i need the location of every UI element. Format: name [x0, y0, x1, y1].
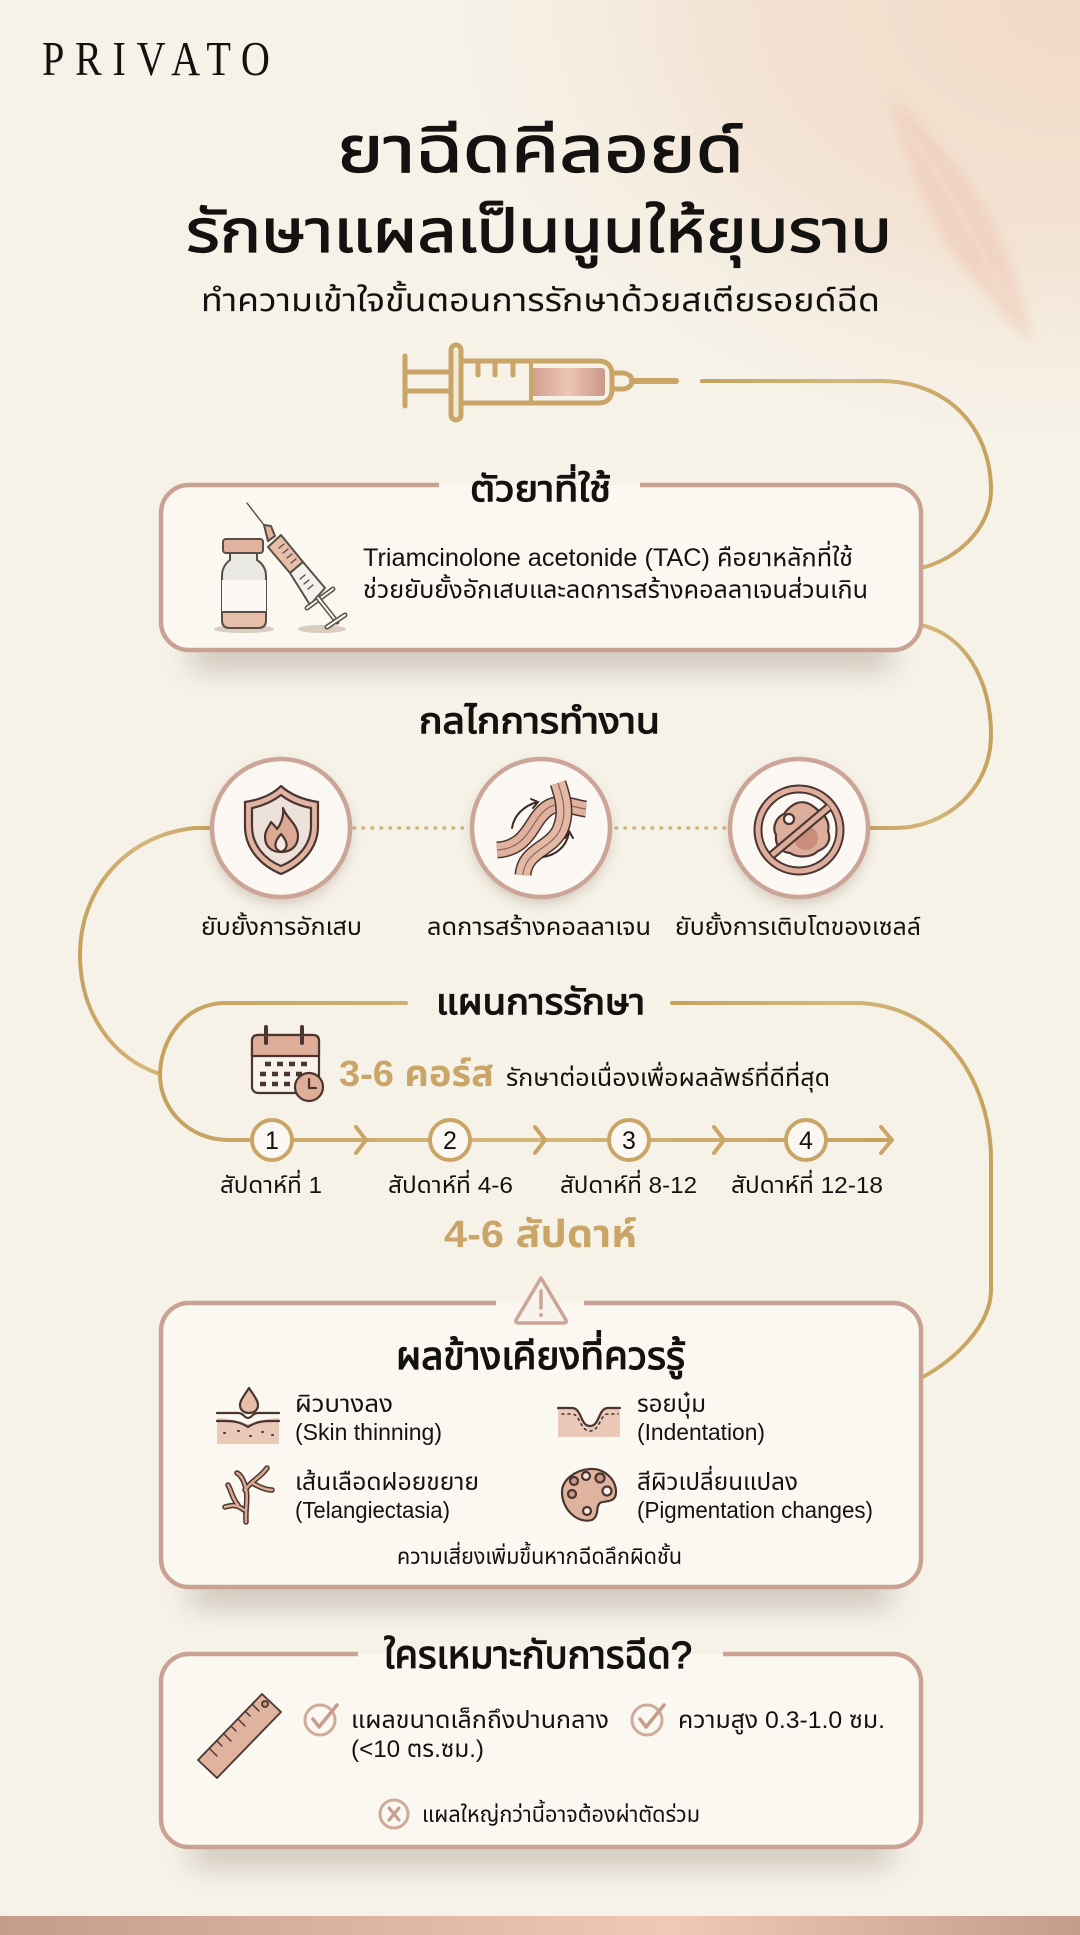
text: drug description: Triamcinolone acetonide (TAC) คือยาหลักที่ใช้ — [363, 540, 853, 572]
connector path: plan header left to timeline — [160, 1003, 890, 1140]
item: skin thinning — [217, 1388, 442, 1445]
step 4 — [786, 1120, 826, 1160]
heading: who: ใครเหมาะกับการฉีด? — [384, 1635, 692, 1677]
item: skin thinning: ผิวบางลง — [295, 1391, 393, 1418]
icon: ruler — [198, 1694, 281, 1778]
week labels: สัปดาห์ที่ 8-12 — [560, 1169, 697, 1198]
text: interval: 4-6 สัปดาห์ — [444, 1214, 637, 1256]
arrows — [356, 1127, 892, 1153]
heading: treatment plan: แผนการรักษา — [436, 981, 645, 1022]
connector path: mechanism to plan — [80, 828, 210, 1074]
check item: small size: (<10 ตร.ซม.) — [351, 1736, 484, 1763]
step 2 — [430, 1120, 470, 1160]
panel: drug used: ช่วยยับยั้งอักเสบและลดการสร้างคอลลาเจนส่วนเกิน — [363, 573, 868, 604]
footer bar — [0, 1916, 1080, 1935]
label: ยับยั้งการเติบโตของเซลล์ — [675, 911, 921, 941]
step 4: 4 — [799, 1127, 813, 1155]
item: pigmentation: สีผิวเปลี่ยนแปลง — [637, 1465, 798, 1496]
subtitle: ทำความเข้าใจขั้นตอนการรักษาด้วยสเตียรอยด์ฉีด — [201, 280, 880, 318]
item: indentation — [558, 1390, 765, 1445]
heading: side effects: ผลข้างเคียงที่ควรรู้ — [396, 1330, 685, 1379]
check item: small size: แผลขนาดเล็กถึงปานกลาง — [351, 1706, 609, 1734]
check item: height: ความสูง 0.3-1.0 ซม. — [678, 1707, 885, 1735]
label: ลดการสร้างคอลลาเจน — [427, 914, 651, 941]
step 1 — [252, 1120, 292, 1160]
title — [186, 114, 892, 268]
item: telangiectasia: (Telangiectasia) — [295, 1497, 450, 1523]
title: ยาฉีดคีลอยด์ — [337, 114, 744, 186]
week labels: สัปดาห์ที่ 1 — [220, 1169, 322, 1198]
heading: mechanism: กลไกการทำงาน — [419, 700, 660, 741]
dotted links between circles — [354, 826, 725, 830]
mechanism item: inhibit inflammation — [201, 759, 362, 941]
label: ยับยั้งการอักเสบ — [201, 911, 362, 941]
icon: crossed-out cell — [758, 789, 840, 871]
timeline — [220, 1120, 892, 1198]
icon: large syringe — [405, 345, 676, 420]
mechanism item: reduce collagen — [427, 759, 651, 941]
icon: calendar with clock — [252, 1027, 323, 1101]
panel: who is suitable — [161, 1635, 921, 1865]
title: รักษาแผลเป็นนูนให้ยุบราบ — [186, 198, 892, 268]
week labels: สัปดาห์ที่ 4-6 — [388, 1169, 513, 1198]
heading: drug: ตัวยาที่ใช้ — [470, 464, 611, 509]
week labels: สัปดาห์ที่ 12-18 — [731, 1169, 883, 1198]
step 2: 2 — [443, 1127, 457, 1155]
week labels — [220, 1169, 883, 1198]
item: pigmentation: (Pigmentation changes) — [637, 1497, 873, 1523]
connector path: plan header right to side effects — [672, 1003, 991, 1378]
step 1: 1 — [265, 1127, 279, 1155]
cross item: larger scars: แผลใหญ่กว่านี้อาจต้องผ่าตัดร่วม — [422, 1799, 700, 1827]
check item: small size — [305, 1705, 609, 1763]
connector path: drug card to mechanism — [869, 625, 991, 828]
step 3: 3 — [622, 1127, 636, 1155]
item: skin thinning: (Skin thinning) — [295, 1419, 442, 1445]
panel: side effects — [161, 1278, 921, 1605]
item: indentation: (Indentation) — [637, 1419, 765, 1445]
connector path: syringe to drug card — [702, 381, 991, 568]
item: pigmentation — [562, 1465, 873, 1523]
step 3 — [609, 1120, 649, 1160]
note: risk: ความเสี่ยงเพิ่มขึ้นหากฉีดลึกผิดชั้น — [397, 1541, 682, 1569]
text: course count: รักษาต่อเนื่องเพื่อผลลัพธ์ที่ดีที่สุด — [506, 1061, 830, 1093]
item: indentation: รอยบุ๋ม — [637, 1390, 706, 1419]
icon: shield with flame — [245, 786, 318, 874]
item: telangiectasia — [225, 1468, 479, 1523]
logo: PRIVATO: PRIVATO — [42, 31, 270, 86]
icon: vial and syringe — [214, 503, 346, 633]
item: telangiectasia: เส้นเลือดฝอยขยาย — [295, 1469, 479, 1496]
text: course count — [339, 1053, 830, 1094]
text: course count: 3-6 คอร์ส — [339, 1053, 494, 1094]
icon: collagen strands — [497, 783, 586, 875]
panel: drug used — [161, 464, 921, 668]
icon: warning triangle — [516, 1278, 566, 1323]
mechanism item: inhibit cell growth — [675, 759, 921, 941]
